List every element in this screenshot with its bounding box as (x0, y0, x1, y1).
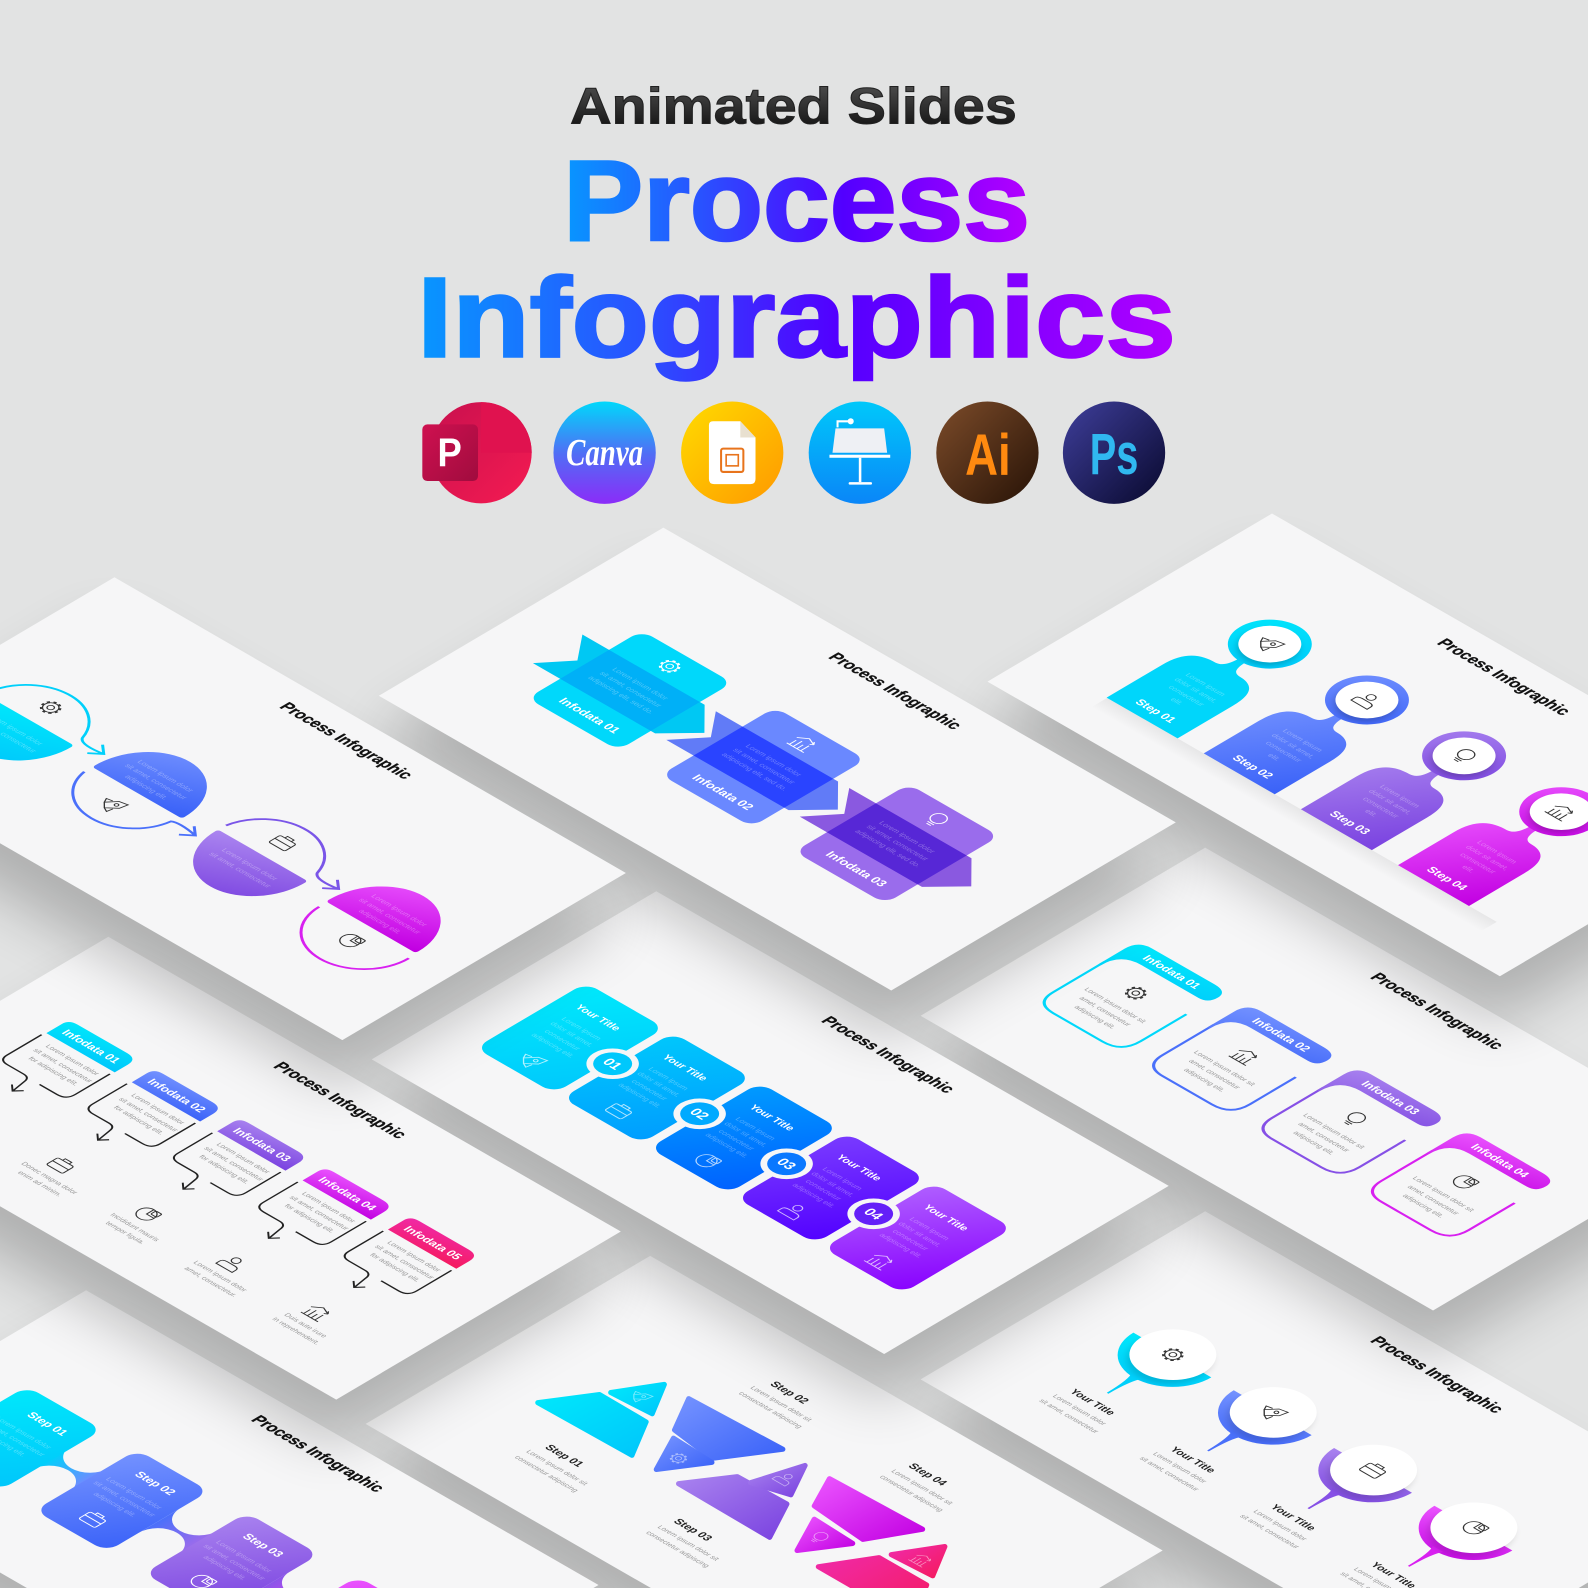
step 2 tile: sit amet, consectetur (91, 1480, 158, 1518)
card 3: Infodata 03 (1358, 1079, 1423, 1117)
card 1 (1034, 941, 1228, 1053)
step 2 tile: Lorem ipsum dolor (104, 1476, 165, 1511)
step 4 half circle: Lorem ipsum dolor (369, 893, 430, 928)
step 1 disc (1026, 1314, 1242, 1441)
lower item 1 (10, 1148, 101, 1202)
lower item 4: Duis aute irure (282, 1313, 328, 1339)
tile 4: Your Title (833, 1154, 884, 1183)
tile 1: dolor sit amet, (548, 1020, 596, 1048)
step 1 bottle: dolor sit amet, (1172, 676, 1220, 704)
tile 2: adipiscing elit. (616, 1082, 664, 1109)
step 2 bottle: Step 02 (1229, 753, 1277, 781)
box 4: sit amet, consectetur (287, 1195, 350, 1232)
tile 3: Your Title (746, 1104, 797, 1133)
card 3: adipiscing elit. (1291, 1131, 1336, 1156)
card 3: Lorem ipsum dolor sit (1301, 1113, 1366, 1150)
step 4 bottle: dolor sit amet, (1464, 844, 1512, 872)
box 4: for adipiscing elit. (282, 1203, 336, 1234)
step 2 disc: sit amet, consectetur (1137, 1456, 1201, 1492)
tile 2 (562, 1033, 752, 1143)
step 2 tile (35, 1450, 209, 1552)
puzzle connectors (30, 1446, 328, 1588)
step 3 ribbon box: sit amet, consectetur (864, 823, 932, 862)
icon: Canva (553, 402, 656, 504)
step 3 caption: consectetur adipiscing (644, 1530, 711, 1569)
icon: Keynote (809, 402, 911, 504)
slide title: Process Infographic (1366, 1334, 1508, 1416)
lower item 2: Incididunt mauris (108, 1212, 161, 1243)
step 1 ribbon box: Infodata 01 (555, 696, 624, 735)
step 3 tile: adipiscing elit. (201, 1554, 249, 1582)
step 2 disc: Lorem ipsum dolor (1151, 1452, 1208, 1485)
step 3 ribbon box: Lorem ipsum dolor (877, 820, 938, 855)
heading: Animated Slides: Animated Slides (570, 78, 1017, 135)
step 2 disc (1127, 1372, 1343, 1498)
slide title: Process Infographic (1366, 970, 1508, 1052)
step 2 bottle: consectetur (1263, 740, 1305, 764)
step 4 bottle: consectetur (1458, 851, 1499, 875)
step 2 tile: Step 02 (131, 1470, 179, 1497)
heading: Process: Process (563, 137, 1030, 265)
tile 5: Lorem ipsum (907, 1216, 952, 1242)
card 4: amet, consectetur (1405, 1185, 1461, 1216)
step 4 tile (255, 1576, 430, 1588)
slide title: Process Infographic (269, 1059, 411, 1141)
step 2 ribbon box: sit amet, consectetur (731, 747, 798, 786)
slide title: Process Infographic (247, 1413, 389, 1495)
tile 5: adipiscing elit. (877, 1232, 925, 1259)
triangle group step 1 (538, 1384, 664, 1455)
slide: bottom right, stem discs (916, 1211, 1588, 1588)
box 1: sit amet, consectetur (31, 1048, 94, 1084)
badge 02 (663, 1092, 737, 1135)
step 4 caption: consectetur adipiscing (878, 1475, 944, 1513)
step 4 bottle: Lorem ipsum (1475, 839, 1519, 865)
step 2 caption: Step 02 (767, 1380, 811, 1406)
step 1 bottle: Lorem ipsum (1183, 672, 1228, 697)
tile 5 (823, 1183, 1013, 1293)
box 2: Infodata 02 (144, 1077, 209, 1115)
lower item 3 (182, 1247, 271, 1299)
slide: center, numbered tiles (367, 891, 1169, 1400)
step 3 disc: sit amet, consectetur (1238, 1514, 1301, 1550)
tile 4: Lorem ipsum (820, 1166, 865, 1192)
slide title: Process Infographic (275, 700, 418, 782)
step 4 bottle: elit. (1460, 864, 1477, 874)
card 1: Infodata 01 (1139, 953, 1204, 991)
triangle group step 5 (818, 1546, 945, 1588)
step 3 half circle (169, 804, 373, 924)
step 1 bottle: Step 01 (1132, 697, 1179, 725)
step 1 half circle (0, 670, 138, 788)
step 2 ribbon box: adipiscing elit, sed do. (719, 751, 790, 792)
step 1 bottle: consectetur (1166, 684, 1208, 708)
step 3 bottle: Lorem ipsum (1378, 783, 1422, 809)
slide: middle left, callout boxes (0, 937, 621, 1445)
card 2 (1144, 1004, 1337, 1116)
step 2 ribbon box: Infodata 02 (689, 773, 757, 812)
tile 1: Your Title (572, 1004, 623, 1033)
badge 04 (837, 1192, 911, 1235)
step 3 bottle (1301, 717, 1528, 850)
box 1: for adipiscing elit. (26, 1056, 80, 1087)
step 3 tile (144, 1513, 319, 1588)
slide title: Process Infographic (824, 650, 966, 732)
step 2 half circle: Lorem ipsum dolor (135, 758, 196, 794)
slide: bottom middle, triangles (361, 1256, 1163, 1588)
box 3: Lorem ipsum dolor (214, 1142, 272, 1175)
icon: Google Slides (681, 402, 783, 504)
step 3 bottle: elit. (1363, 808, 1380, 818)
box 2: for adipiscing elit. (112, 1105, 165, 1136)
badge 03: 03 (773, 1156, 801, 1172)
step 2 half circle: adipiscing elit. (123, 773, 171, 801)
step 2 tile: adipiscing elit. (91, 1491, 139, 1518)
box 3 (150, 1117, 308, 1210)
box 4: Lorem ipsum dolor (300, 1191, 357, 1224)
lower item 4: in reprehenderit. (270, 1317, 321, 1346)
tile 1: adipiscing elit. (529, 1032, 577, 1059)
lower item 2 (99, 1199, 183, 1248)
tile 3: consectetur (716, 1128, 757, 1152)
step 1 ribbon box: adipiscing elit, sed do. (586, 675, 657, 715)
icon: Canva: Canva (566, 432, 643, 474)
step 3 ribbon box: Infodata 03 (822, 849, 891, 889)
step 1 ribbon box: sit amet, consectetur (597, 670, 665, 709)
step 1 caption: Step 01 (542, 1443, 586, 1469)
step 3 half circle: sit amet, consectetur (207, 851, 274, 889)
card 2: Lorem ipsum dolor sit (1192, 1050, 1256, 1087)
box 4 (235, 1166, 394, 1259)
card 4: adipiscing elit. (1400, 1193, 1445, 1219)
box 5: Infodata 05 (400, 1224, 465, 1262)
slide: top middle, ribbons (374, 528, 1176, 1036)
triangle icons (627, 1389, 934, 1567)
tile 3 (649, 1083, 839, 1193)
slide: top right, bottle shapes (982, 513, 1588, 1022)
badge 02: 02 (686, 1106, 714, 1122)
step 3 tile: Step 03 (239, 1532, 287, 1559)
step 1 tile: Step 01 (24, 1410, 71, 1438)
card 2: amet, consectetur (1186, 1059, 1242, 1091)
step 3 tile: sit amet, consectetur (201, 1543, 268, 1582)
lower item 1: enim ad minim. (16, 1170, 63, 1198)
step 2 ribbon box: Lorem ipsum dolor (743, 743, 805, 778)
card 4: Lorem ipsum dolor sit (1410, 1176, 1475, 1213)
step 2 disc: Your Title (1167, 1446, 1218, 1475)
icon: Illustrator: Ai (965, 423, 1011, 488)
slide title: Process Infographic (1433, 636, 1575, 718)
tile 2: Lorem ipsum (646, 1066, 691, 1092)
step 3 ribbon box (767, 768, 1028, 920)
step 1 bottle (1107, 606, 1333, 738)
step 2 bottle (1204, 661, 1431, 794)
card 1: adipiscing elit. (1072, 1005, 1117, 1030)
step 3 disc (1227, 1430, 1443, 1556)
tile 4: dolor sit amet, (809, 1170, 857, 1198)
step 1 tile (0, 1386, 103, 1490)
step 1 ribbon box: Lorem ipsum dolor (610, 666, 671, 701)
step 3 ribbon box: adipiscing elit, sed do. (853, 828, 924, 869)
tile 1: Lorem ipsum (559, 1016, 604, 1042)
tile 2: dolor sit amet, (635, 1070, 683, 1098)
step 3 half circle: Lorem ipsum dolor (219, 847, 281, 882)
box 5: for adipiscing elit. (368, 1253, 421, 1283)
lower item 2: tempor ligula. (103, 1221, 146, 1246)
step 3 caption (644, 1515, 737, 1569)
triangle group step 3 (679, 1465, 805, 1537)
step 4 caption (878, 1459, 971, 1513)
lower item 4 (270, 1298, 352, 1346)
badge 01: 01 (599, 1056, 627, 1072)
tile 1: consectetur (542, 1028, 583, 1052)
icon: Photoshop: Ps (1090, 422, 1138, 487)
step 1 caption: Lorem ipsum dolor sit (524, 1449, 589, 1487)
tile 4: consectetur (803, 1178, 844, 1202)
badge 01 (576, 1042, 650, 1085)
tile 5: dolor sit amet, (896, 1220, 944, 1248)
box 2: Lorem ipsum dolor (129, 1093, 186, 1126)
tile 2: consectetur (629, 1078, 670, 1102)
tile 2: Your Title (659, 1054, 710, 1083)
badge 04: 04 (860, 1206, 888, 1222)
step 4 caption: Step 04 (905, 1462, 950, 1488)
step 2 half circle: sit amet, consectetur (123, 762, 190, 801)
step 4 bottle: Step 04 (1423, 865, 1471, 893)
card 3 (1253, 1066, 1446, 1179)
step 1 caption (512, 1439, 606, 1493)
slide: middle right, outlined cards (916, 848, 1588, 1356)
lower item 3: amet, consectetur. (182, 1266, 238, 1298)
tile 3: dolor sit amet, (722, 1120, 770, 1148)
tile 4: adipiscing elit. (790, 1182, 838, 1209)
box 5 (321, 1216, 479, 1308)
step 1 bottle: elit. (1168, 696, 1186, 706)
card 4: Infodata 04 (1467, 1142, 1532, 1180)
step 3 bottle: Step 03 (1326, 809, 1374, 837)
step 2 bottle: Lorem ipsum (1280, 727, 1325, 753)
step 3 disc: Lorem ipsum dolor (1251, 1509, 1308, 1542)
icon: Illustrator (936, 402, 1039, 504)
box 5: sit amet, consectetur (373, 1244, 436, 1281)
tile 1 (475, 983, 665, 1093)
step 4 half circle: sit amet, consectetur (356, 897, 424, 936)
step 3 disc: Your Title (1267, 1503, 1318, 1533)
step 2 caption: Lorem ipsum dolor sit (748, 1385, 813, 1423)
lower item 1: Donec magna dolor (19, 1161, 79, 1196)
step 2 half circle (48, 737, 253, 857)
box 3: for adipiscing elit. (197, 1154, 250, 1185)
slide: bottom left, puzzle tiles (0, 1290, 599, 1588)
step 4 disc (1327, 1487, 1543, 1588)
card 2: Infodata 02 (1249, 1016, 1314, 1054)
box 5: Lorem ipsum dolor (385, 1240, 442, 1273)
badge 03 (750, 1142, 824, 1185)
box 1 (0, 1019, 137, 1112)
step 4 bottle (1398, 773, 1588, 906)
step 4 half circle: adipiscing elit. (356, 908, 404, 935)
tile 5: consectetur (890, 1228, 931, 1252)
tile 3: adipiscing elit. (703, 1132, 751, 1159)
tile 4 (736, 1133, 926, 1243)
box 4: Infodata 04 (315, 1175, 380, 1213)
step 3 bottle: consectetur (1361, 796, 1402, 819)
slide: top left, half circles (0, 577, 626, 1086)
step 3 caption: Lorem ipsum dolor sit (655, 1525, 720, 1562)
heading: Infographics: Infographics (417, 254, 1176, 381)
card 1: Lorem ipsum dolor sit (1082, 987, 1147, 1024)
step 4 caption: Lorem ipsum dolor sit (889, 1469, 954, 1506)
step 2 bottle: elit. (1265, 752, 1283, 762)
step 1 caption: consectetur adipiscing (512, 1455, 579, 1493)
card 3: amet, consectetur (1296, 1122, 1351, 1154)
tile 5: Your Title (920, 1204, 971, 1233)
step 1 ribbon box (500, 615, 761, 767)
step 4 half circle (275, 873, 467, 984)
card 2: adipiscing elit. (1182, 1068, 1226, 1093)
step 3 tile: Lorem ipsum dolor (214, 1539, 275, 1574)
step 3 caption: Step 03 (670, 1517, 715, 1543)
icon: Photoshop (1063, 402, 1165, 504)
step 1 disc: Lorem ipsum dolor (1050, 1394, 1108, 1427)
slide title: Process Infographic (817, 1014, 959, 1096)
step 2 caption (737, 1375, 830, 1430)
card 1: amet, consectetur (1077, 996, 1132, 1028)
box 3: Infodata 03 (229, 1126, 294, 1164)
icon: PowerPoint: P (438, 431, 462, 475)
card 4 (1362, 1129, 1556, 1242)
step 3 bottle: dolor sit amet, (1366, 788, 1414, 816)
step 2 bottle: dolor sit amet, (1269, 732, 1317, 760)
box 2: sit amet, consectetur (116, 1097, 180, 1133)
triangle group step 4 (797, 1479, 923, 1551)
step 2 caption: consectetur adipiscing (737, 1391, 803, 1430)
box 2 (64, 1068, 223, 1161)
box 1: Lorem ipsum dolor (43, 1044, 101, 1077)
step 1 disc: sit amet, consectetur (1037, 1398, 1100, 1435)
box 3: sit amet, consectetur (202, 1146, 265, 1183)
step 2 ribbon box (634, 692, 895, 844)
tile 3: Lorem ipsum (733, 1116, 778, 1142)
step 1 disc: Your Title (1067, 1388, 1117, 1417)
icon: PowerPoint (422, 402, 532, 503)
box 1: Infodata 01 (59, 1028, 124, 1066)
lower item 3: Lorem ipsum dolor (191, 1260, 249, 1293)
triangle group step 2 (656, 1399, 783, 1470)
